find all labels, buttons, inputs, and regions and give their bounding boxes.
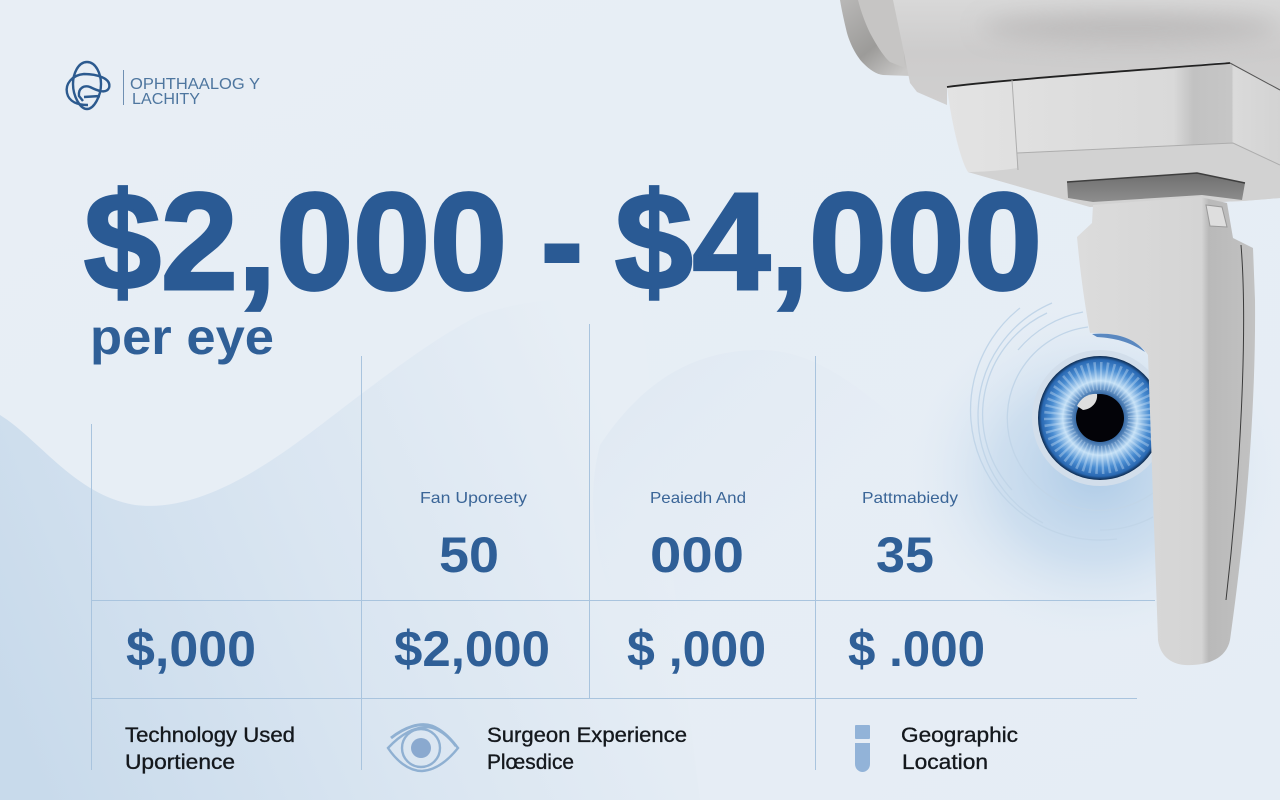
label: Fan Uporeety xyxy=(420,490,527,507)
factor: geographic location: Location xyxy=(902,751,988,774)
device xyxy=(840,0,1280,665)
label: Pattmabiedy xyxy=(862,490,958,507)
arm inner edge xyxy=(1226,245,1244,600)
housing shadow band xyxy=(980,14,1280,42)
headline price range: $2,000 xyxy=(84,165,507,319)
eyeball rim xyxy=(1032,350,1168,486)
factor: surgeon experience: Surgeon Experience xyxy=(487,724,687,747)
logo text xyxy=(130,76,260,108)
headline price range: - xyxy=(541,165,583,319)
housing lower band xyxy=(968,143,1280,207)
label: Peaiedh And xyxy=(650,490,746,507)
sonar rings xyxy=(971,303,1153,540)
headline price range: $4,000 xyxy=(615,165,1042,319)
column: fan uporeety xyxy=(420,490,527,583)
upper housing xyxy=(893,0,1280,105)
value: 000 xyxy=(650,527,744,583)
pupil xyxy=(1076,394,1124,442)
iris rays xyxy=(1058,376,1142,460)
logo mark xyxy=(67,62,109,109)
column: peaiedh and xyxy=(650,490,746,583)
lens xyxy=(840,0,912,76)
headline price range xyxy=(84,165,1042,319)
arm bracket window xyxy=(1206,205,1227,227)
factor: surgeon experience xyxy=(487,724,687,774)
collar xyxy=(1067,173,1245,202)
lower housing xyxy=(947,63,1280,207)
logo text: LACHITY xyxy=(132,91,200,108)
price 2: $2,000 xyxy=(394,621,550,677)
factor: surgeon experience: Plœsdice xyxy=(487,751,574,774)
column: pattmabiedy xyxy=(862,490,958,583)
value: 50 xyxy=(439,527,499,583)
icon: test tube xyxy=(855,725,870,772)
blue lid xyxy=(1092,334,1145,352)
highlight xyxy=(1077,394,1097,410)
price row xyxy=(126,621,985,677)
iris xyxy=(1038,356,1162,480)
price 1: $,000 xyxy=(126,621,256,677)
factor: technology used xyxy=(125,724,295,774)
logo divider xyxy=(123,70,124,105)
factor: technology used: Uportience xyxy=(125,751,235,774)
factor: geographic location: Geographic xyxy=(901,724,1018,747)
price 3: $ ,000 xyxy=(627,621,766,677)
per eye subheading: per eye xyxy=(90,309,274,365)
housing seams xyxy=(947,63,1230,87)
factor: technology used: Technology Used xyxy=(125,724,295,747)
factor: geographic location xyxy=(901,724,1018,774)
price 4: $ .000 xyxy=(848,621,985,677)
logo text: OPHTHAALOG Y xyxy=(130,76,260,93)
icon: eye illustration xyxy=(971,303,1168,540)
logo xyxy=(67,62,260,109)
table grid lines xyxy=(91,324,1155,770)
arm xyxy=(1077,197,1255,665)
value: 35 xyxy=(876,527,934,583)
icon: eye outline xyxy=(388,725,458,771)
